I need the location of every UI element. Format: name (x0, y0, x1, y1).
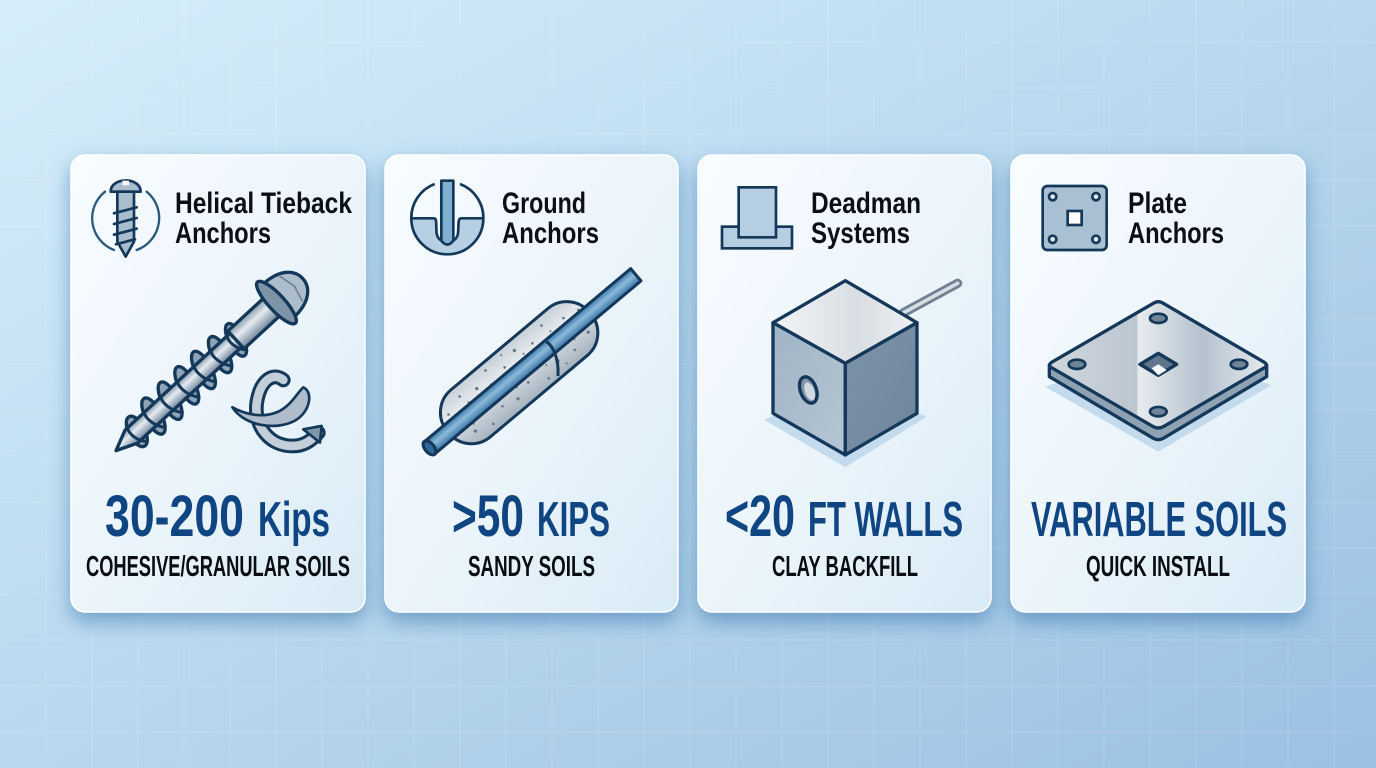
icon: rotation arrow (232, 377, 322, 446)
stat: FT WALLS (808, 493, 963, 547)
heading: Systems (811, 217, 910, 250)
stat: 30-200 (105, 484, 244, 549)
heading: Anchors (1128, 217, 1224, 250)
heading (811, 187, 921, 250)
heading: Helical Tieback (175, 187, 352, 220)
heading: Anchors (175, 217, 271, 250)
heading: Anchors (502, 217, 599, 250)
heading: Plate (1128, 187, 1187, 220)
icon: plate (1043, 186, 1107, 250)
stat: KIPS (537, 493, 610, 547)
stat (725, 484, 963, 549)
panel: plate anchors (1011, 155, 1305, 612)
heading (502, 187, 599, 250)
panel: ground anchors (385, 155, 678, 612)
soil note: SANDY SOILS (468, 551, 595, 583)
heading (1128, 187, 1224, 250)
heading: Ground (502, 187, 586, 220)
heading: Deadman (811, 187, 921, 220)
illustration: helical screw (97, 258, 322, 471)
icon: deadman block (722, 187, 792, 248)
heading (175, 187, 352, 250)
soil note: CLAY BACKFILL (772, 551, 918, 583)
panel: helical tieback anchors (71, 155, 365, 612)
illustration: grouted anchor body with tendon (406, 251, 656, 474)
illustration: concrete deadman cube (764, 281, 958, 467)
icon: ground anchor (411, 181, 483, 254)
panel: deadman systems (698, 155, 991, 612)
install note: QUICK INSTALL (1086, 551, 1230, 583)
stat (452, 484, 610, 549)
stat: <20 (725, 484, 795, 549)
stat: Kips (258, 493, 330, 547)
illustration: steel plate (1045, 302, 1272, 452)
icon: helical screw in rotation arcs (92, 180, 159, 257)
soil note: COHESIVE/GRANULAR SOILS (86, 551, 350, 583)
stat: >50 (452, 484, 524, 549)
